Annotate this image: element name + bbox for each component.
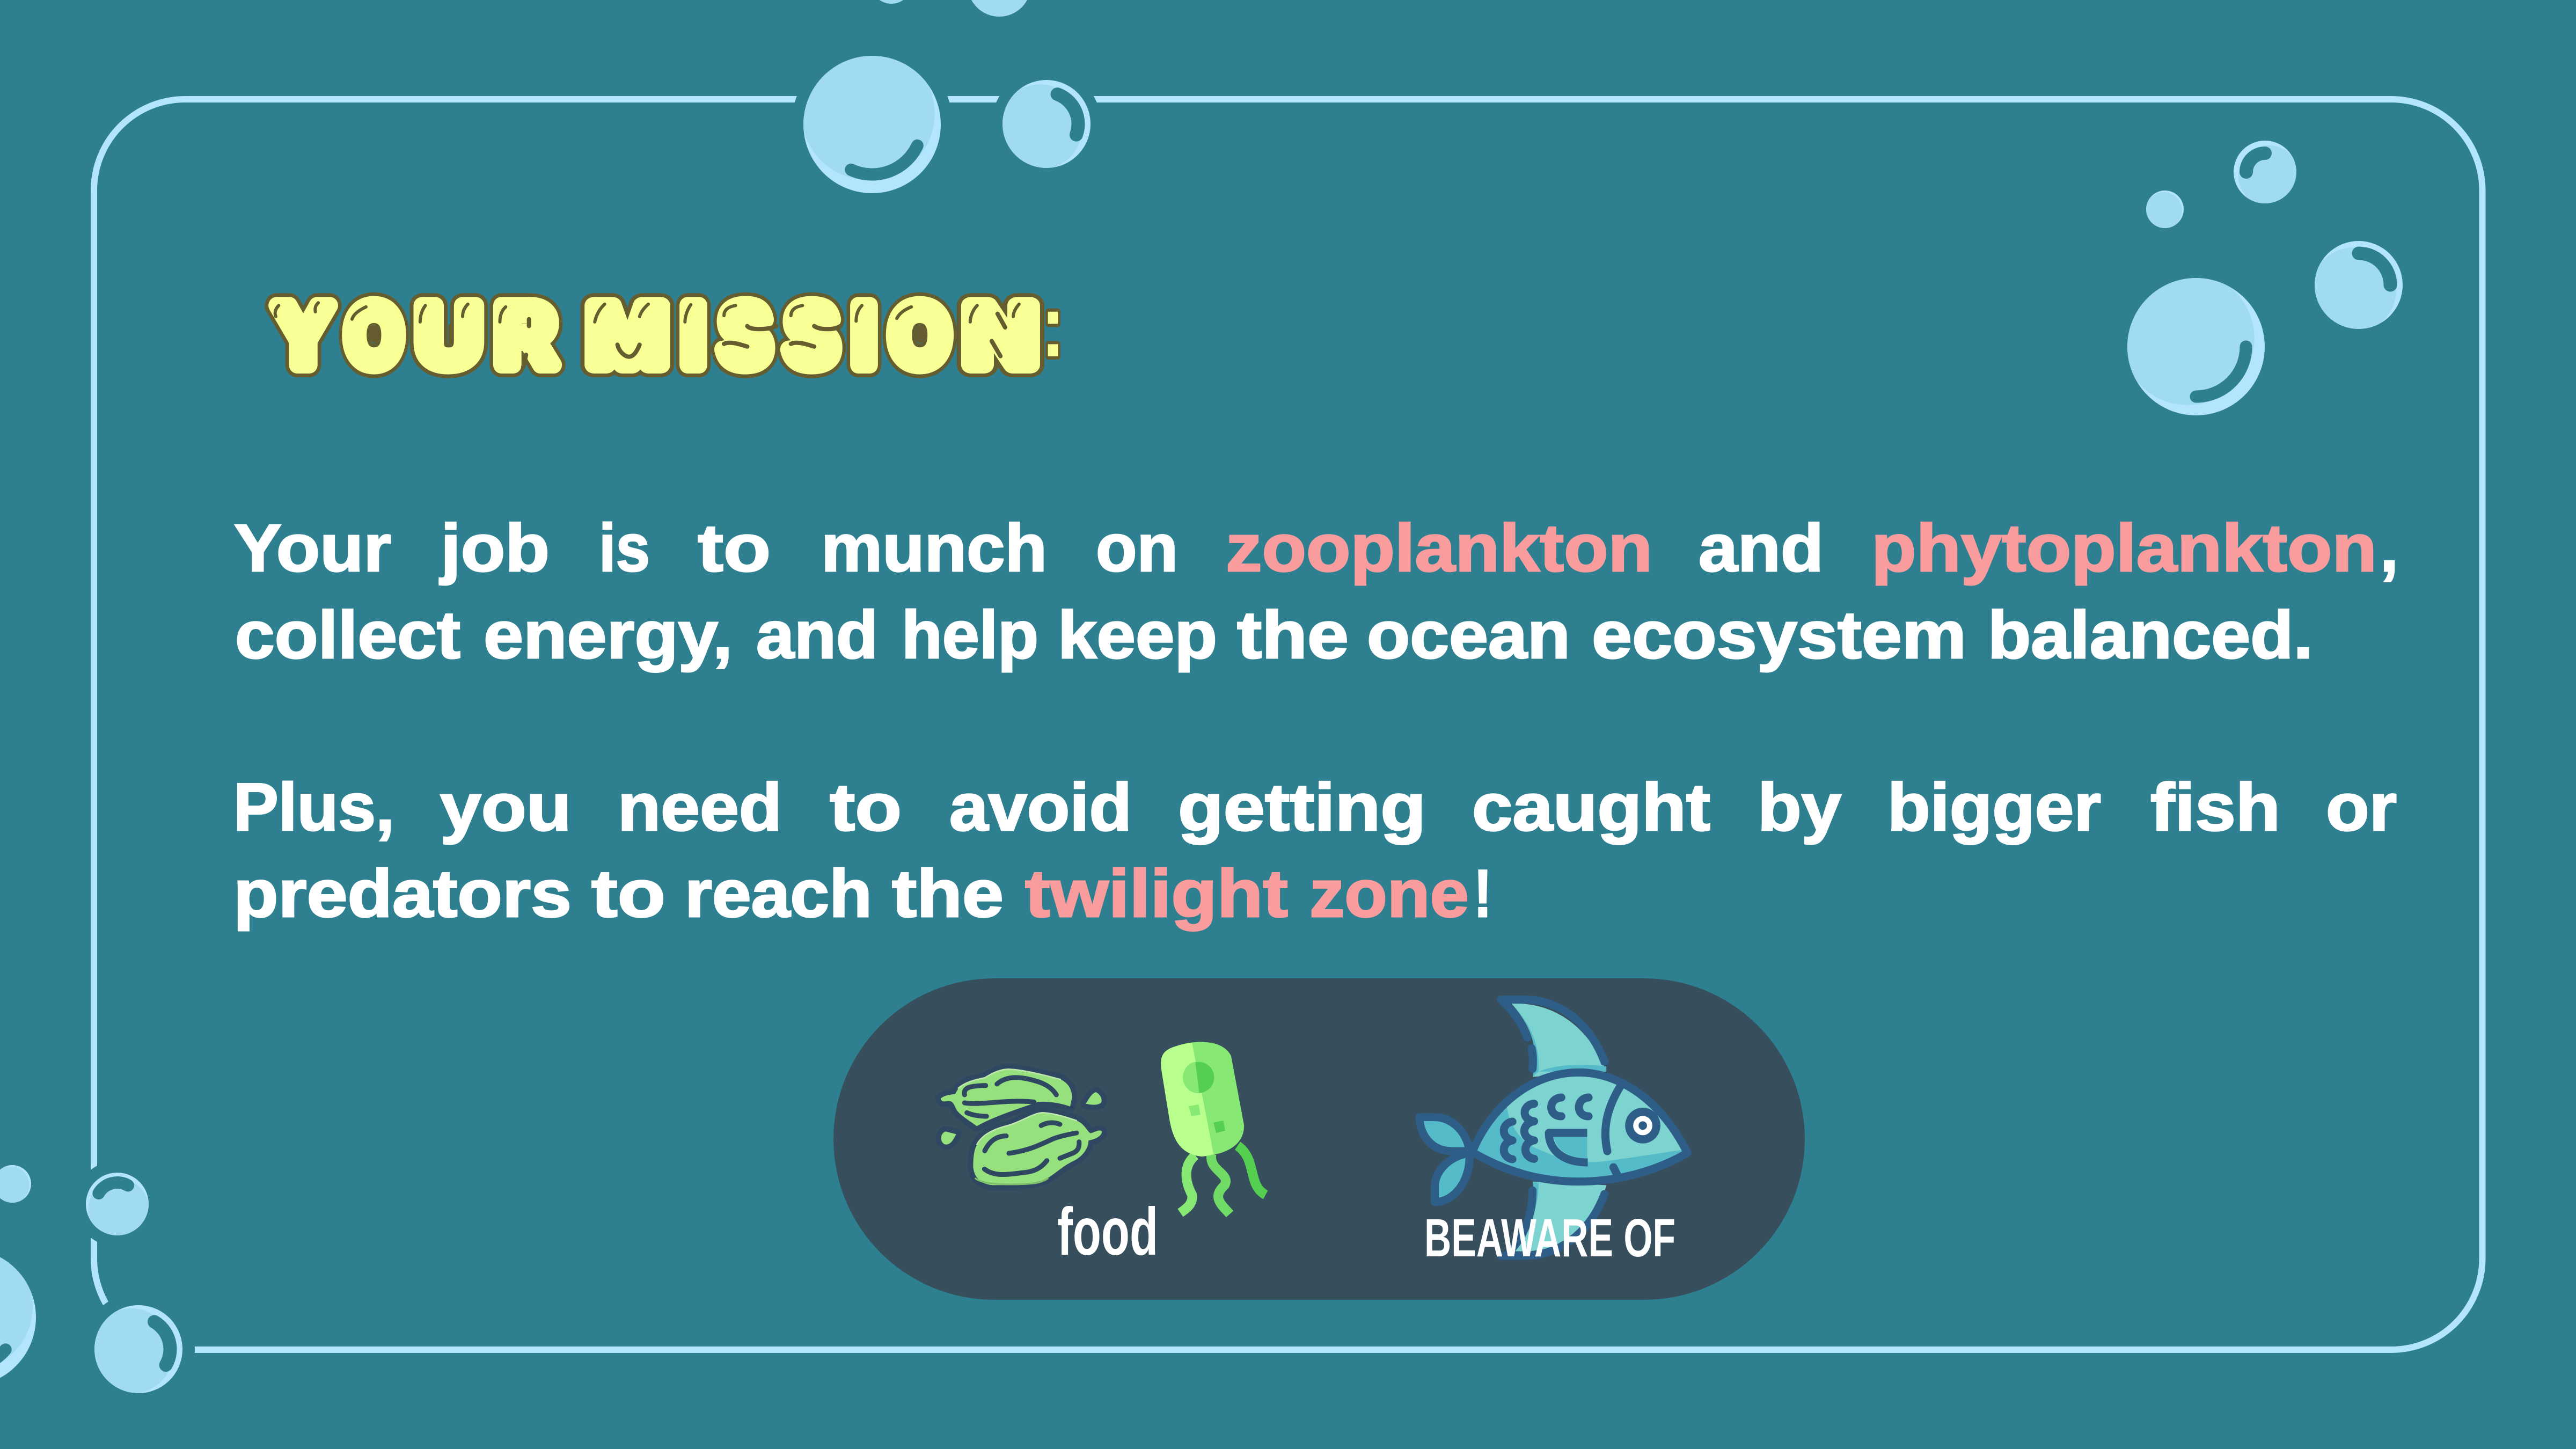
bubble: bottom left corner <box>73 1287 199 1413</box>
bubble: right upper <box>2234 141 2299 206</box>
line one: munch <box>821 511 1047 586</box>
bubble: top edge small <box>871 0 912 4</box>
title: your mission: I <box>682 287 705 384</box>
line four: ! <box>1474 857 1492 931</box>
bubble: top edge medium <box>968 0 1031 17</box>
line one: job <box>440 511 550 586</box>
label: food: food <box>1057 1195 1158 1269</box>
title: your mission: S <box>720 287 771 384</box>
title: your mission: U <box>417 287 481 384</box>
line two: help <box>902 598 1038 672</box>
bubble: left on frame <box>73 1161 163 1251</box>
title: your mission: O <box>346 287 402 384</box>
line three: bigger <box>1887 770 2101 845</box>
title: your mission: : <box>1041 276 1065 375</box>
line four: the <box>892 857 1004 931</box>
line three: getting <box>1178 770 1426 845</box>
bubble: left small <box>0 1165 31 1203</box>
bubble: left large <box>0 1212 68 1414</box>
icon: phytoplankton <box>941 1069 1102 1185</box>
title: your mission: O <box>890 287 949 384</box>
line three: fish <box>2150 770 2280 845</box>
text block: job description <box>234 511 2398 672</box>
line one: zooplankton <box>1226 511 1652 586</box>
title: your mission: R <box>496 287 555 384</box>
title: your mission: R <box>496 287 555 384</box>
title: your mission <box>275 276 1065 384</box>
bubble: right medium <box>2311 241 2403 333</box>
line one: phytoplankton <box>1871 511 2377 586</box>
title: your mission: M <box>588 287 667 384</box>
line three: Plus, <box>233 770 394 845</box>
line two: collect <box>235 598 460 672</box>
line two: balanced. <box>1988 598 2313 672</box>
line two: ecosystem <box>1592 598 1966 672</box>
title: your mission: Y <box>275 287 331 384</box>
line one: and <box>1699 511 1824 586</box>
title: your mission: I <box>853 287 875 384</box>
title: your mission: O <box>890 287 949 384</box>
title: your mission: S <box>786 287 838 384</box>
label: beware of: BEAWARE OF <box>1424 1208 1675 1268</box>
icon: predator fish <box>1419 1000 1687 1256</box>
bubble: right small <box>2145 191 2184 229</box>
line three: need <box>618 770 782 845</box>
line four: twilight <box>1025 857 1288 931</box>
title: your mission: S <box>786 287 838 384</box>
line three: you <box>440 770 572 845</box>
line one: to <box>698 511 771 586</box>
text block: avoid predators <box>233 770 2397 931</box>
bubble: top medium <box>1002 80 1091 168</box>
title: your mission: O <box>346 287 402 384</box>
line three: caught <box>1472 770 1710 845</box>
line one: , <box>2380 511 2398 586</box>
title: your mission: U <box>417 287 481 384</box>
title: your mission: N <box>964 287 1037 384</box>
title: your mission: I <box>853 287 875 384</box>
line one: Your <box>234 511 391 586</box>
title: your mission: I <box>682 287 705 384</box>
bubble: top large <box>803 56 941 193</box>
line three: to <box>830 770 902 845</box>
icon: zooplankton <box>1161 1042 1265 1214</box>
line two: keep <box>1058 598 1217 672</box>
line three: by <box>1758 770 1841 845</box>
line two: and <box>756 598 878 672</box>
line four: reach <box>685 857 872 931</box>
line one: on <box>1096 511 1178 586</box>
line four: zone <box>1309 857 1469 931</box>
bubble: right large <box>2121 272 2265 415</box>
title: your mission: Y <box>275 287 331 384</box>
pill background <box>833 978 1805 1300</box>
line three: or <box>2326 770 2397 845</box>
title: your mission: M <box>588 287 667 384</box>
line two: the <box>1237 598 1349 672</box>
line four: to <box>591 857 665 931</box>
title: your mission: S <box>720 287 771 384</box>
line two: energy, <box>484 598 733 672</box>
line one: is <box>599 511 650 586</box>
title: your mission: N <box>964 287 1037 384</box>
line two: ocean <box>1367 598 1570 672</box>
line four: predators <box>233 857 572 931</box>
line three: avoid <box>949 770 1132 845</box>
panel: food and predators pill <box>833 978 1805 1300</box>
